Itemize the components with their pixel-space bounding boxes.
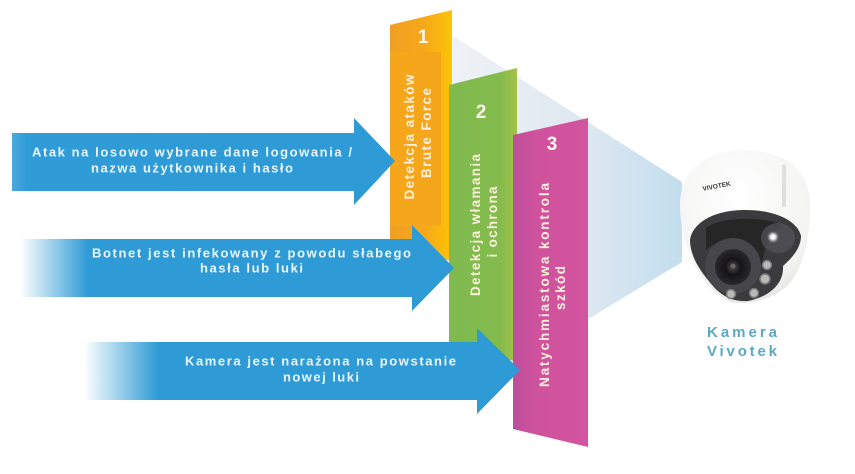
- panel 2 label: i ochrona: [485, 186, 500, 258]
- arrow 1: [12, 118, 395, 205]
- arrow 2: [20, 225, 454, 311]
- icon: Vivotek dome camera: [680, 150, 810, 303]
- panel 1 label: Detekcja ataków: [402, 74, 417, 200]
- lens: [705, 238, 761, 294]
- arrow 1 text: [32, 144, 352, 176]
- panel 2 label: Detekcja włamania: [468, 154, 483, 296]
- camera caption: Kamera: [707, 324, 778, 341]
- projection cone toward camera: [453, 36, 682, 318]
- panel 1 number: 1: [418, 27, 429, 48]
- camera caption: Vivotek: [707, 343, 778, 360]
- arrow 2 text: Botnet jest infekowany z powodu słabego: [92, 246, 411, 260]
- camera caption: [707, 324, 778, 360]
- smoked dome: [690, 210, 801, 301]
- IR LEDs: [726, 260, 772, 298]
- arrow 3 text: nowej luki: [283, 370, 359, 384]
- panel 3 label: Natychmiastowa kontrola: [537, 183, 552, 387]
- panel 2: green: [449, 68, 517, 362]
- brand label: VIVOTEK: [702, 181, 732, 193]
- panel 3 label: [537, 183, 568, 387]
- camera body: [680, 150, 810, 303]
- arrow 3: [84, 328, 520, 414]
- arrow 3 text: [185, 354, 456, 384]
- arrow 1 text: nazwa użytkownika i hasło: [91, 160, 293, 176]
- arrow 1 text: Atak na losowo wybrane dane logowania /: [32, 144, 352, 160]
- panel 1 label: [402, 74, 434, 200]
- panel 1: orange: [390, 10, 452, 260]
- panel 3: magenta: [513, 118, 588, 447]
- panel 3 label: szkód: [553, 266, 568, 310]
- arrow 2 text: [92, 246, 411, 276]
- arrow 2 text: hasła lub luki: [200, 260, 303, 276]
- arrow 3 text: Kamera jest narażona na powstanie: [185, 354, 456, 368]
- panel 2 number: 2: [476, 102, 486, 123]
- panel 3 number: 3: [547, 134, 557, 155]
- panel 2 label: [468, 154, 500, 296]
- antenna: [782, 165, 786, 207]
- panel 1 label: Brute Force: [419, 88, 434, 178]
